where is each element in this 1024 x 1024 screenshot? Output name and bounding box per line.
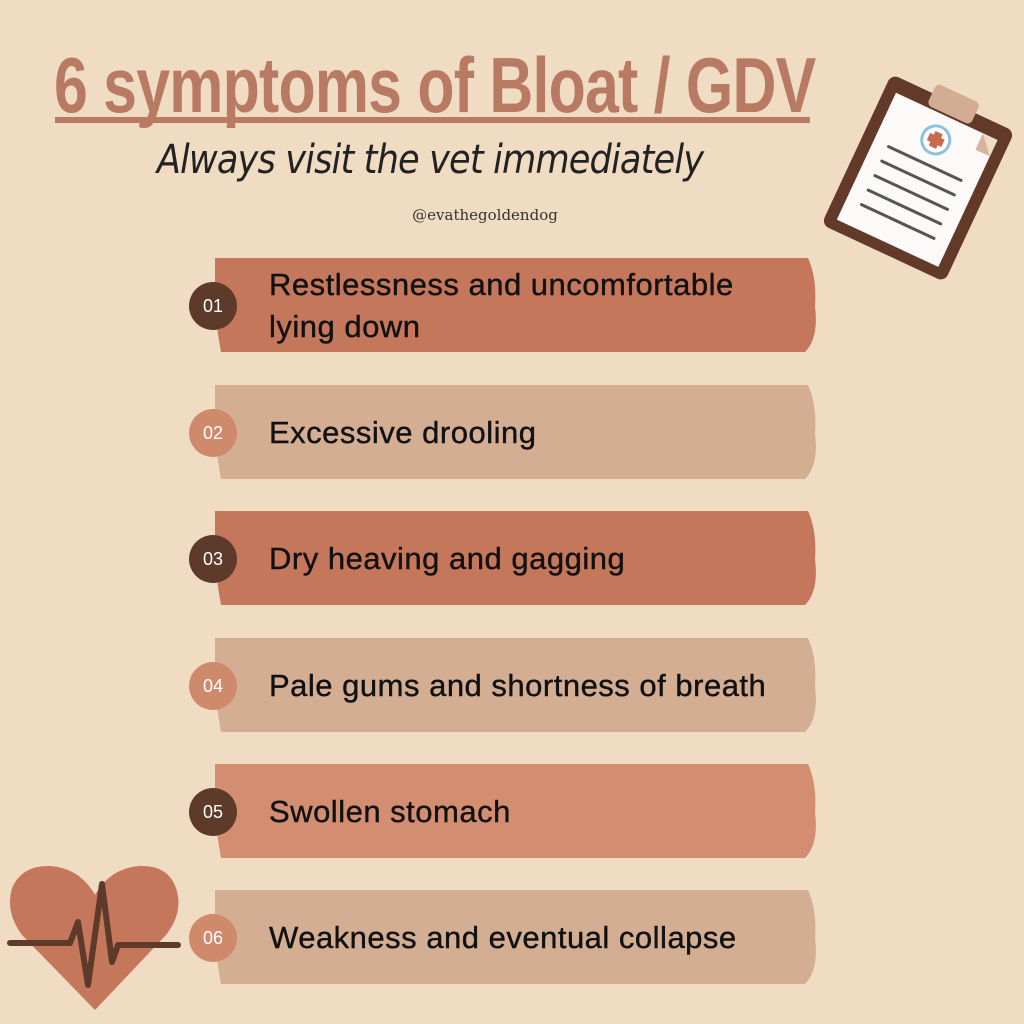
- item 3: Dry heaving and gagging: [269, 541, 625, 576]
- item 1: lying down: [269, 309, 420, 344]
- item 3: 03: [203, 549, 223, 569]
- item 6: [189, 890, 816, 984]
- item 3: [189, 511, 816, 605]
- item 5: [189, 764, 816, 858]
- item 6: 06: [203, 928, 223, 948]
- item 1: [189, 258, 816, 352]
- item 5: 05: [203, 802, 223, 822]
- item 1: 01: [203, 296, 223, 316]
- item 4: 04: [203, 676, 223, 696]
- item 6: Weakness and eventual collapse: [269, 920, 737, 955]
- icon: clipboard: [824, 76, 1012, 280]
- icon: heart with ECG: [7, 866, 181, 1010]
- item 2: [189, 385, 816, 479]
- item 1: Restlessness and uncomfortable: [269, 267, 734, 302]
- subtitle: Always visit the vet immediately: [157, 137, 703, 183]
- item 4: [189, 638, 816, 732]
- title: 6 symptoms of Bloat / GDV: [54, 41, 815, 129]
- item 2: Excessive drooling: [269, 415, 536, 450]
- item 5: Swollen stomach: [269, 794, 511, 829]
- item 2: 02: [203, 423, 223, 443]
- item 4: Pale gums and shortness of breath: [269, 668, 766, 703]
- handle: @evathegoldendog: [412, 206, 558, 224]
